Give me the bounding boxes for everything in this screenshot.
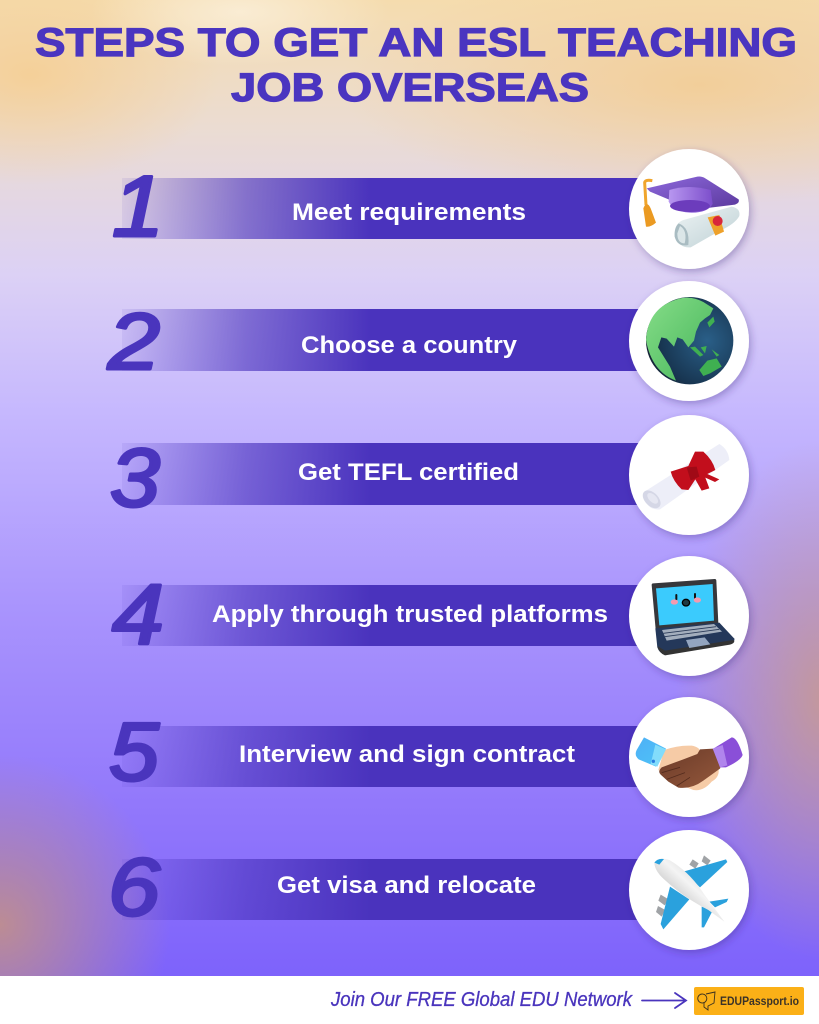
step 3 number: 3: [110, 431, 160, 524]
icon: passport logo: [698, 992, 715, 1010]
step 5 label: Interview and sign contract: [239, 741, 575, 768]
icon: globe: [646, 297, 733, 384]
step 1 label: Meet requirements: [292, 199, 526, 226]
step 5 icon circle: [629, 697, 749, 817]
step 4 icon circle: [629, 556, 749, 676]
icon: laptop with smiling face: [653, 581, 734, 655]
step 2 label: Choose a country: [301, 332, 518, 359]
step 1: [112, 149, 749, 269]
step 5: [109, 697, 749, 817]
step 6 banner: [122, 859, 652, 920]
step 5 number: 5: [109, 705, 160, 798]
step 2 number: 2: [107, 297, 160, 386]
step 2: [107, 281, 749, 401]
footer call to action: Join Our FREE Global EDU Network: [330, 989, 633, 1011]
step 5 banner: [122, 726, 652, 787]
step 4 number: 4: [112, 568, 164, 663]
icon: airplane: [654, 855, 728, 929]
step 6 icon circle: [629, 830, 749, 950]
step 1 banner: [122, 178, 652, 239]
title: STEPS TO GET AN ESL TEACHING: [35, 21, 797, 65]
icon: diploma with red bow: [639, 444, 729, 512]
step 3 label: Get TEFL certified: [298, 459, 519, 486]
footer band: [0, 976, 819, 1024]
title: JOB OVERSEAS: [231, 66, 589, 110]
step 6 label: Get visa and relocate: [277, 872, 536, 899]
step 1 number: 1: [112, 159, 164, 255]
step 3 icon circle: [629, 415, 749, 535]
step 6: [108, 830, 749, 950]
step 3: [110, 415, 749, 535]
step 3 banner: [122, 443, 652, 505]
step 4 label: Apply through trusted platforms: [212, 601, 608, 628]
step 2 icon circle: [629, 281, 749, 401]
step 6 number: 6: [108, 842, 160, 933]
step 1 icon circle: [629, 149, 749, 269]
step 2 banner: [122, 309, 652, 371]
icon: handshake: [636, 737, 743, 790]
arrow: [642, 993, 686, 1008]
EDUPassport button: [694, 987, 804, 1015]
step 4: [112, 556, 749, 676]
brand name: EDUPassport.io: [720, 996, 799, 1008]
icon: graduation cap and diploma: [643, 177, 740, 247]
title: [35, 21, 797, 110]
step 4 banner: [122, 585, 652, 646]
